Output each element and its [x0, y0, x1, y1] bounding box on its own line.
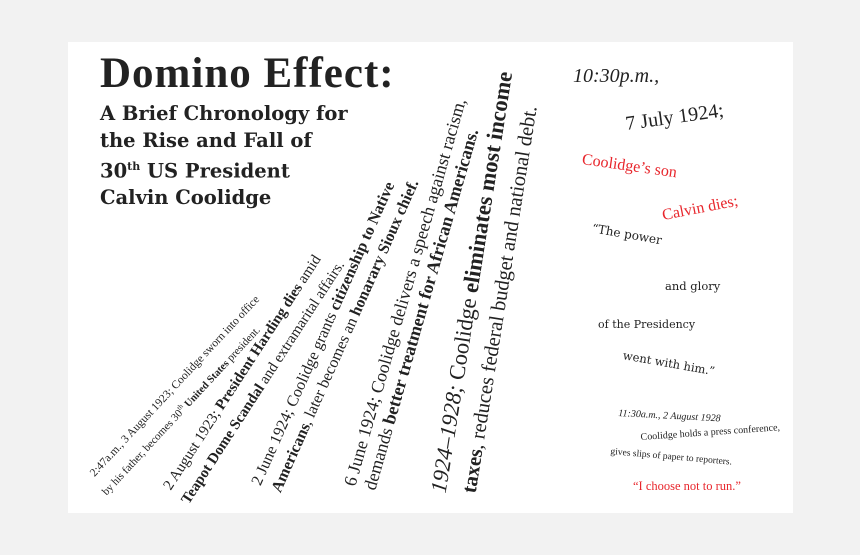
timeline entry: Harding dies: 2 August 1923; President Harding dies amid — [161, 252, 325, 493]
timeline entry: sworn line 2: by his father, becomes 30th United States president. — [100, 324, 263, 498]
subtitle — [100, 102, 348, 209]
quote: of the Presidency: of the Presidency — [598, 318, 695, 331]
panel: card — [68, 42, 793, 513]
quote: The power: “The power — [591, 221, 663, 247]
subtitle: the Rise and Fall of — [100, 128, 312, 152]
right: press conference time: 11:30a.m., 2 August 1928 — [618, 408, 721, 424]
right: date: 7 July 1924; — [624, 99, 725, 135]
right: Calvin dies: Calvin dies; — [661, 193, 739, 224]
timeline entry: taxes: 1924–1928; Coolidge eliminates most income — [426, 70, 517, 495]
quote: and glory: and glory — [665, 279, 720, 293]
timeline entry: taxes line 2: taxes, reduces federal budget and national debt. — [459, 104, 542, 495]
title: Domino Effect: — [100, 50, 395, 97]
timeline entry: speech line 2: demands better treatment for African Americans. — [360, 126, 482, 492]
subtitle: Calvin Coolidge — [100, 186, 271, 209]
timeline entry: speech against racism: 6 June 1924; Coolidge delivers a speech against racism, — [340, 96, 470, 488]
subtitle: A Brief Chronology for — [100, 102, 348, 125]
right: Coolidge's son: Coolidge’s son — [581, 151, 678, 181]
right: time: 10:30p.m., — [573, 65, 659, 87]
subtitle: 30th US President — [100, 160, 290, 182]
timeline entry: citizenship line 2: Americans, later becomes an honarary Sioux chief. — [268, 177, 422, 495]
timeline entry: citizenship: 2 June 1924; Coolidge grants citizenship to Native — [248, 179, 398, 488]
right: press conference: Coolidge holds a press conference, — [640, 422, 780, 443]
timeline entry: sworn into office: 2:47a.m., 3 August 1923; Coolidge sworn into office — [88, 294, 262, 479]
right: slips of paper: gives slips of paper to reporters. — [610, 447, 732, 468]
timeline entry: Harding line 2: Teapot Dome Scandal and extramarital affairs. — [179, 258, 348, 507]
quote: went with him: went with him.” — [622, 348, 716, 378]
right: I choose not to run: “I choose not to run.” — [633, 479, 741, 493]
